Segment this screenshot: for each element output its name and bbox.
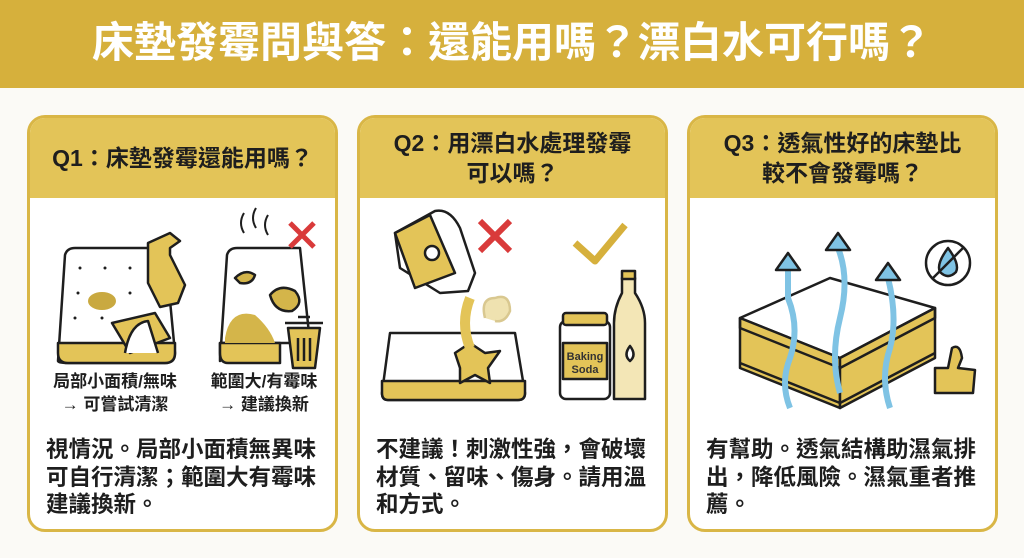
title band — [0, 0, 1024, 88]
caption: large area: 範圍大/有霉味 — [211, 372, 317, 391]
body text Q1: 視情況。局部小面積無異味可自行清潔；範圍大有霉味建議換新。 — [46, 437, 316, 517]
panel: Q1 — [27, 115, 338, 532]
caption: large area: → 建議換新 — [219, 395, 309, 414]
heading Q2: Q2：用漂白水處理發霉 — [394, 130, 631, 156]
illustration Q2: Baking — [567, 351, 603, 363]
heading Q1 — [30, 118, 335, 198]
heading Q3: 較不會發霉嗎？ — [762, 160, 923, 186]
caption: large area — [211, 372, 317, 414]
caption: small area — [53, 372, 177, 414]
illustration Q2 — [380, 209, 646, 402]
panel: Q2 — [357, 115, 668, 532]
heading Q1: Q1：床墊發霉還能用嗎？ — [52, 145, 313, 171]
caption: small area: 局部小面積/無味 — [53, 372, 177, 391]
panel: Q3 — [687, 115, 998, 532]
heading Q3 — [690, 118, 995, 198]
caption: small area: → 可嘗試清潔 — [62, 395, 168, 414]
body text Q3: 有幫助。透氣結構助濕氣排出，降低風險。濕氣重者推薦。 — [706, 437, 976, 517]
illustration Q1 — [56, 208, 323, 370]
heading Q3: Q3：透氣性好的床墊比 — [724, 130, 961, 156]
body text Q2: 不建議！刺激性強，會破壞材質、留味、傷身。請用溫和方式。 — [376, 437, 646, 517]
illustration Q3 — [738, 232, 976, 410]
title: 床墊發霉問與答：還能用嗎？漂白水可行嗎？ — [92, 19, 932, 66]
illustration Q2: Soda — [572, 364, 599, 376]
heading Q2 — [360, 118, 665, 198]
heading Q2: 可以嗎？ — [466, 160, 558, 186]
